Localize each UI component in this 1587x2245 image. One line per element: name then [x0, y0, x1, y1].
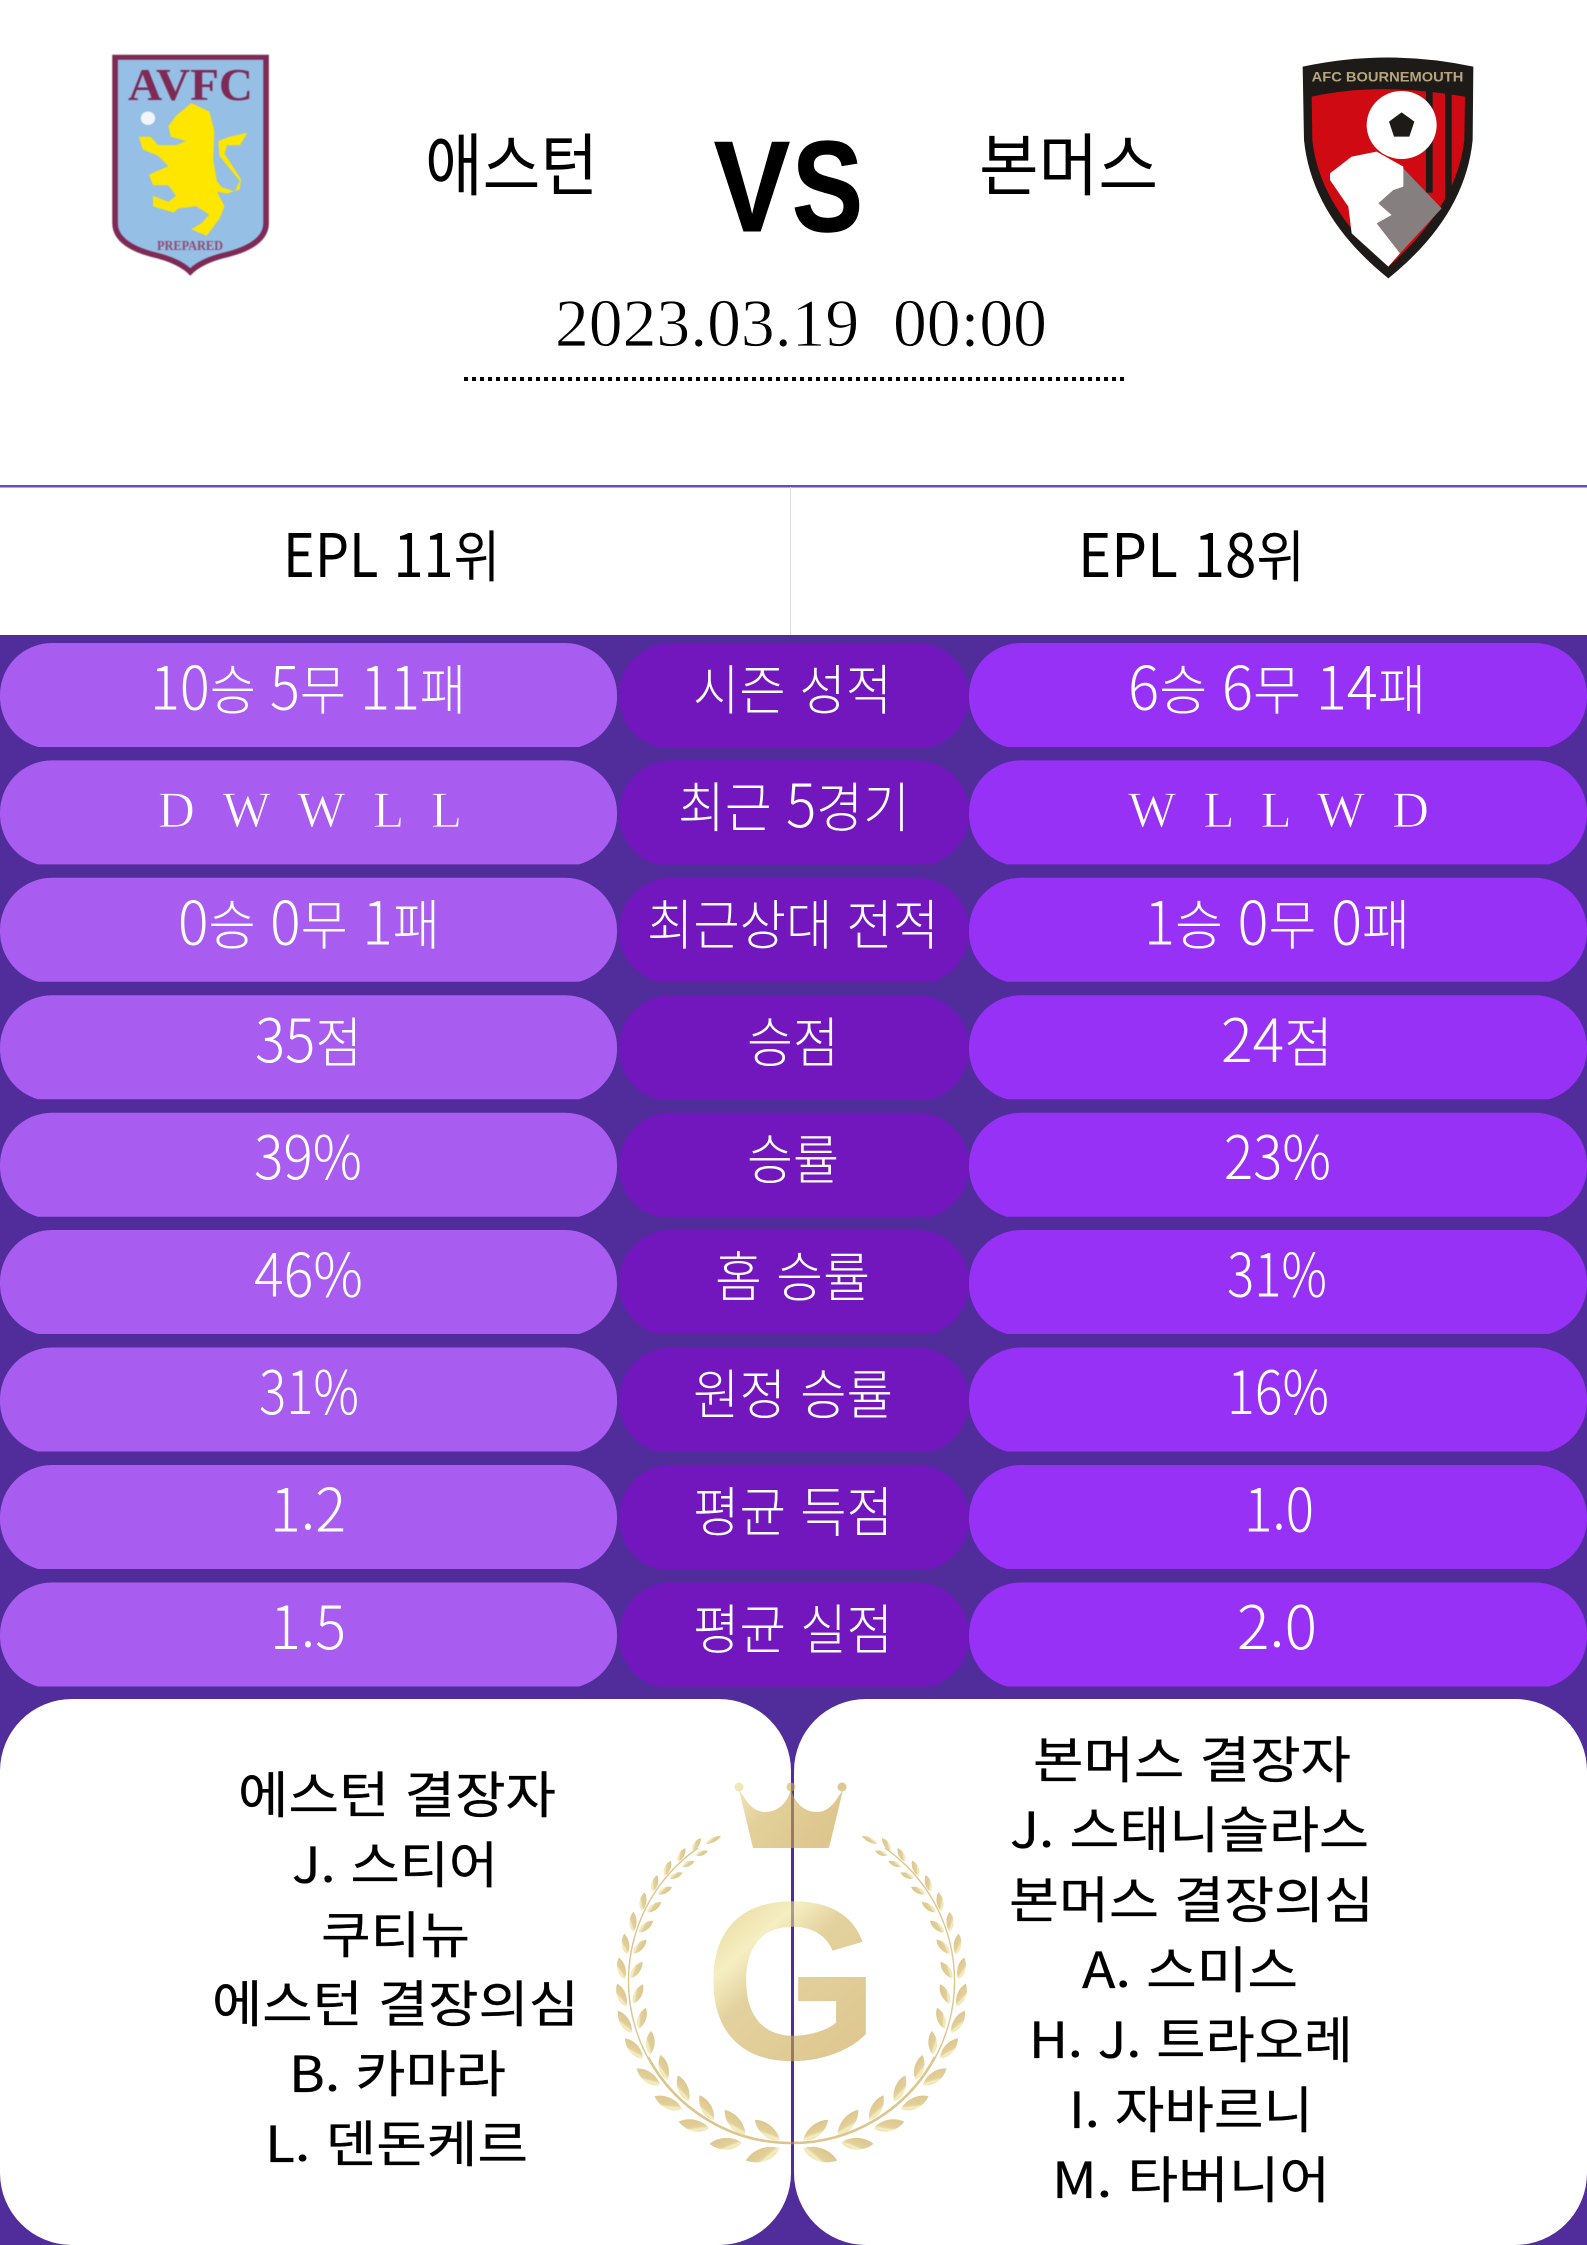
row: average goals conceded — [0, 1580, 1587, 1686]
absentee list: Bournemouth: J. 스태니슬라스 — [1010, 1791, 1369, 1863]
row: average goals scored — [0, 1462, 1587, 1569]
absentee list: Aston Villa: B. 카마라 — [289, 2035, 506, 2107]
left value: 31% — [259, 1345, 359, 1432]
VS heading: V — [714, 115, 790, 259]
rank divider — [790, 487, 791, 635]
row label — [619, 1582, 969, 1686]
right value — [969, 640, 1587, 747]
left value: 0승 0무 1패 — [178, 876, 440, 962]
right value: 31% — [1227, 1228, 1327, 1314]
left value — [0, 1228, 617, 1334]
row label: 승점 — [747, 999, 839, 1078]
right value — [969, 760, 1587, 864]
left value — [0, 1580, 617, 1686]
panel: Bournemouth absentees — [794, 1699, 1587, 2245]
absentee list: Aston Villa: L. 덴돈케르 — [265, 2105, 528, 2177]
letter G: G — [704, 1854, 880, 2107]
team crest: Bournemouth — [1303, 57, 1473, 278]
row label — [619, 878, 969, 982]
wreath right branch — [792, 1834, 970, 2167]
left value — [0, 993, 617, 1099]
row: head to head — [0, 876, 1587, 982]
row label: 최근상대 전적 — [647, 882, 939, 960]
emblem: gold laurel wreath with crown and G — [613, 1782, 970, 2167]
left value: 1.2 — [270, 1462, 346, 1550]
right value — [969, 993, 1587, 1099]
right value — [969, 876, 1587, 982]
absentee list: Aston Villa — [212, 1756, 579, 2177]
absentee list: Bournemouth: H. J. 트라오레 — [1029, 2001, 1353, 2073]
VS heading: S — [792, 115, 863, 259]
absentee list: Bournemouth: A. 스미스 — [1082, 1931, 1298, 2003]
right value: 16% — [1227, 1345, 1329, 1432]
row label — [619, 1465, 969, 1569]
team name: Bournemouth: 본머스 — [979, 111, 1158, 210]
row: recent five matches — [0, 758, 1587, 864]
right value — [969, 1580, 1587, 1686]
row label: 승률 — [747, 1116, 839, 1195]
team name: Aston Villa: 애스턴 — [425, 111, 598, 210]
team crest: Aston Villa: PREPARED — [157, 239, 223, 254]
right value: 1승 0무 0패 — [1144, 876, 1410, 962]
row: points — [0, 993, 1587, 1099]
left value — [0, 876, 617, 982]
right value: 1.0 — [1244, 1462, 1314, 1550]
absentee list: Aston Villa: 에스턴 결장자 — [238, 1756, 556, 1828]
right value — [969, 1228, 1587, 1334]
absentee list: Bournemouth: 본머스 결장의심 — [1009, 1861, 1374, 1933]
wreath left branch — [613, 1834, 792, 2167]
row label — [619, 1113, 969, 1217]
absentee list: Aston Villa: J. 스티어 — [292, 1826, 498, 1898]
league rank: Aston Villa: EPL 11위 — [283, 508, 500, 595]
row label — [619, 1348, 969, 1452]
right value — [969, 1345, 1587, 1452]
row label — [619, 1230, 969, 1334]
absentee list: Bournemouth: I. 자바르니 — [1069, 2071, 1313, 2143]
right value: 2.0 — [1237, 1580, 1317, 1667]
left value: 39% — [254, 1110, 362, 1197]
row label: 평균 실점 — [693, 1586, 893, 1665]
VS heading — [714, 115, 863, 259]
row label — [619, 995, 969, 1099]
row label — [619, 758, 969, 864]
right value — [969, 1110, 1587, 1217]
left value: 1.5 — [270, 1580, 346, 1667]
team crest: Bournemouth: AFC BOURNEMOUTH — [1312, 68, 1463, 84]
left value: 10승 5무 11패 — [150, 640, 466, 728]
absentee list: Aston Villa: 쿠티뉴 — [321, 1896, 470, 1968]
right value: W L L W D — [1128, 783, 1429, 839]
row: home win rate — [0, 1228, 1587, 1334]
row label: 평균 득점 — [693, 1468, 893, 1548]
dotted rule under date — [464, 377, 1126, 381]
crown — [734, 1782, 846, 1848]
left value — [0, 760, 617, 864]
left value — [0, 640, 617, 747]
absentee list: Bournemouth — [1009, 1721, 1374, 2213]
row label — [619, 643, 969, 747]
absentee list: Bournemouth: M. 타버니어 — [1052, 2141, 1330, 2213]
right value — [969, 1462, 1587, 1569]
row: away win rate — [0, 1345, 1587, 1452]
row: win rate — [0, 1110, 1587, 1217]
right value: 23% — [1224, 1110, 1331, 1197]
left value: 35점 — [255, 993, 362, 1080]
row label: 시즌 성적 — [693, 646, 892, 726]
left value — [0, 1345, 617, 1452]
league rank: Bournemouth: EPL 18위 — [1078, 508, 1305, 595]
header rule — [0, 485, 1587, 488]
absentee list: Aston Villa: 에스턴 결장의심 — [212, 1965, 579, 2037]
right value: 24점 — [1221, 993, 1333, 1080]
absentee list: Bournemouth: 본머스 결장자 — [1033, 1721, 1351, 1793]
left value — [0, 1110, 617, 1217]
row label: 홈 승률 — [715, 1234, 870, 1312]
left value: D W W L L — [158, 783, 462, 839]
team crest: Aston Villa — [112, 55, 269, 276]
stats band background — [0, 635, 1587, 2245]
match date and time: 2023.03.19 00:00 — [555, 285, 1047, 361]
panel: Aston Villa absentees — [0, 1699, 791, 2245]
left value: 46% — [254, 1228, 363, 1314]
left value — [0, 1462, 617, 1569]
row label: 원정 승률 — [693, 1351, 893, 1430]
row label: 최근 5경기 — [678, 758, 910, 845]
row: season record — [0, 640, 1587, 747]
team crest: Aston Villa: AVFC — [128, 59, 253, 110]
right value: 6승 6무 14패 — [1128, 640, 1426, 728]
